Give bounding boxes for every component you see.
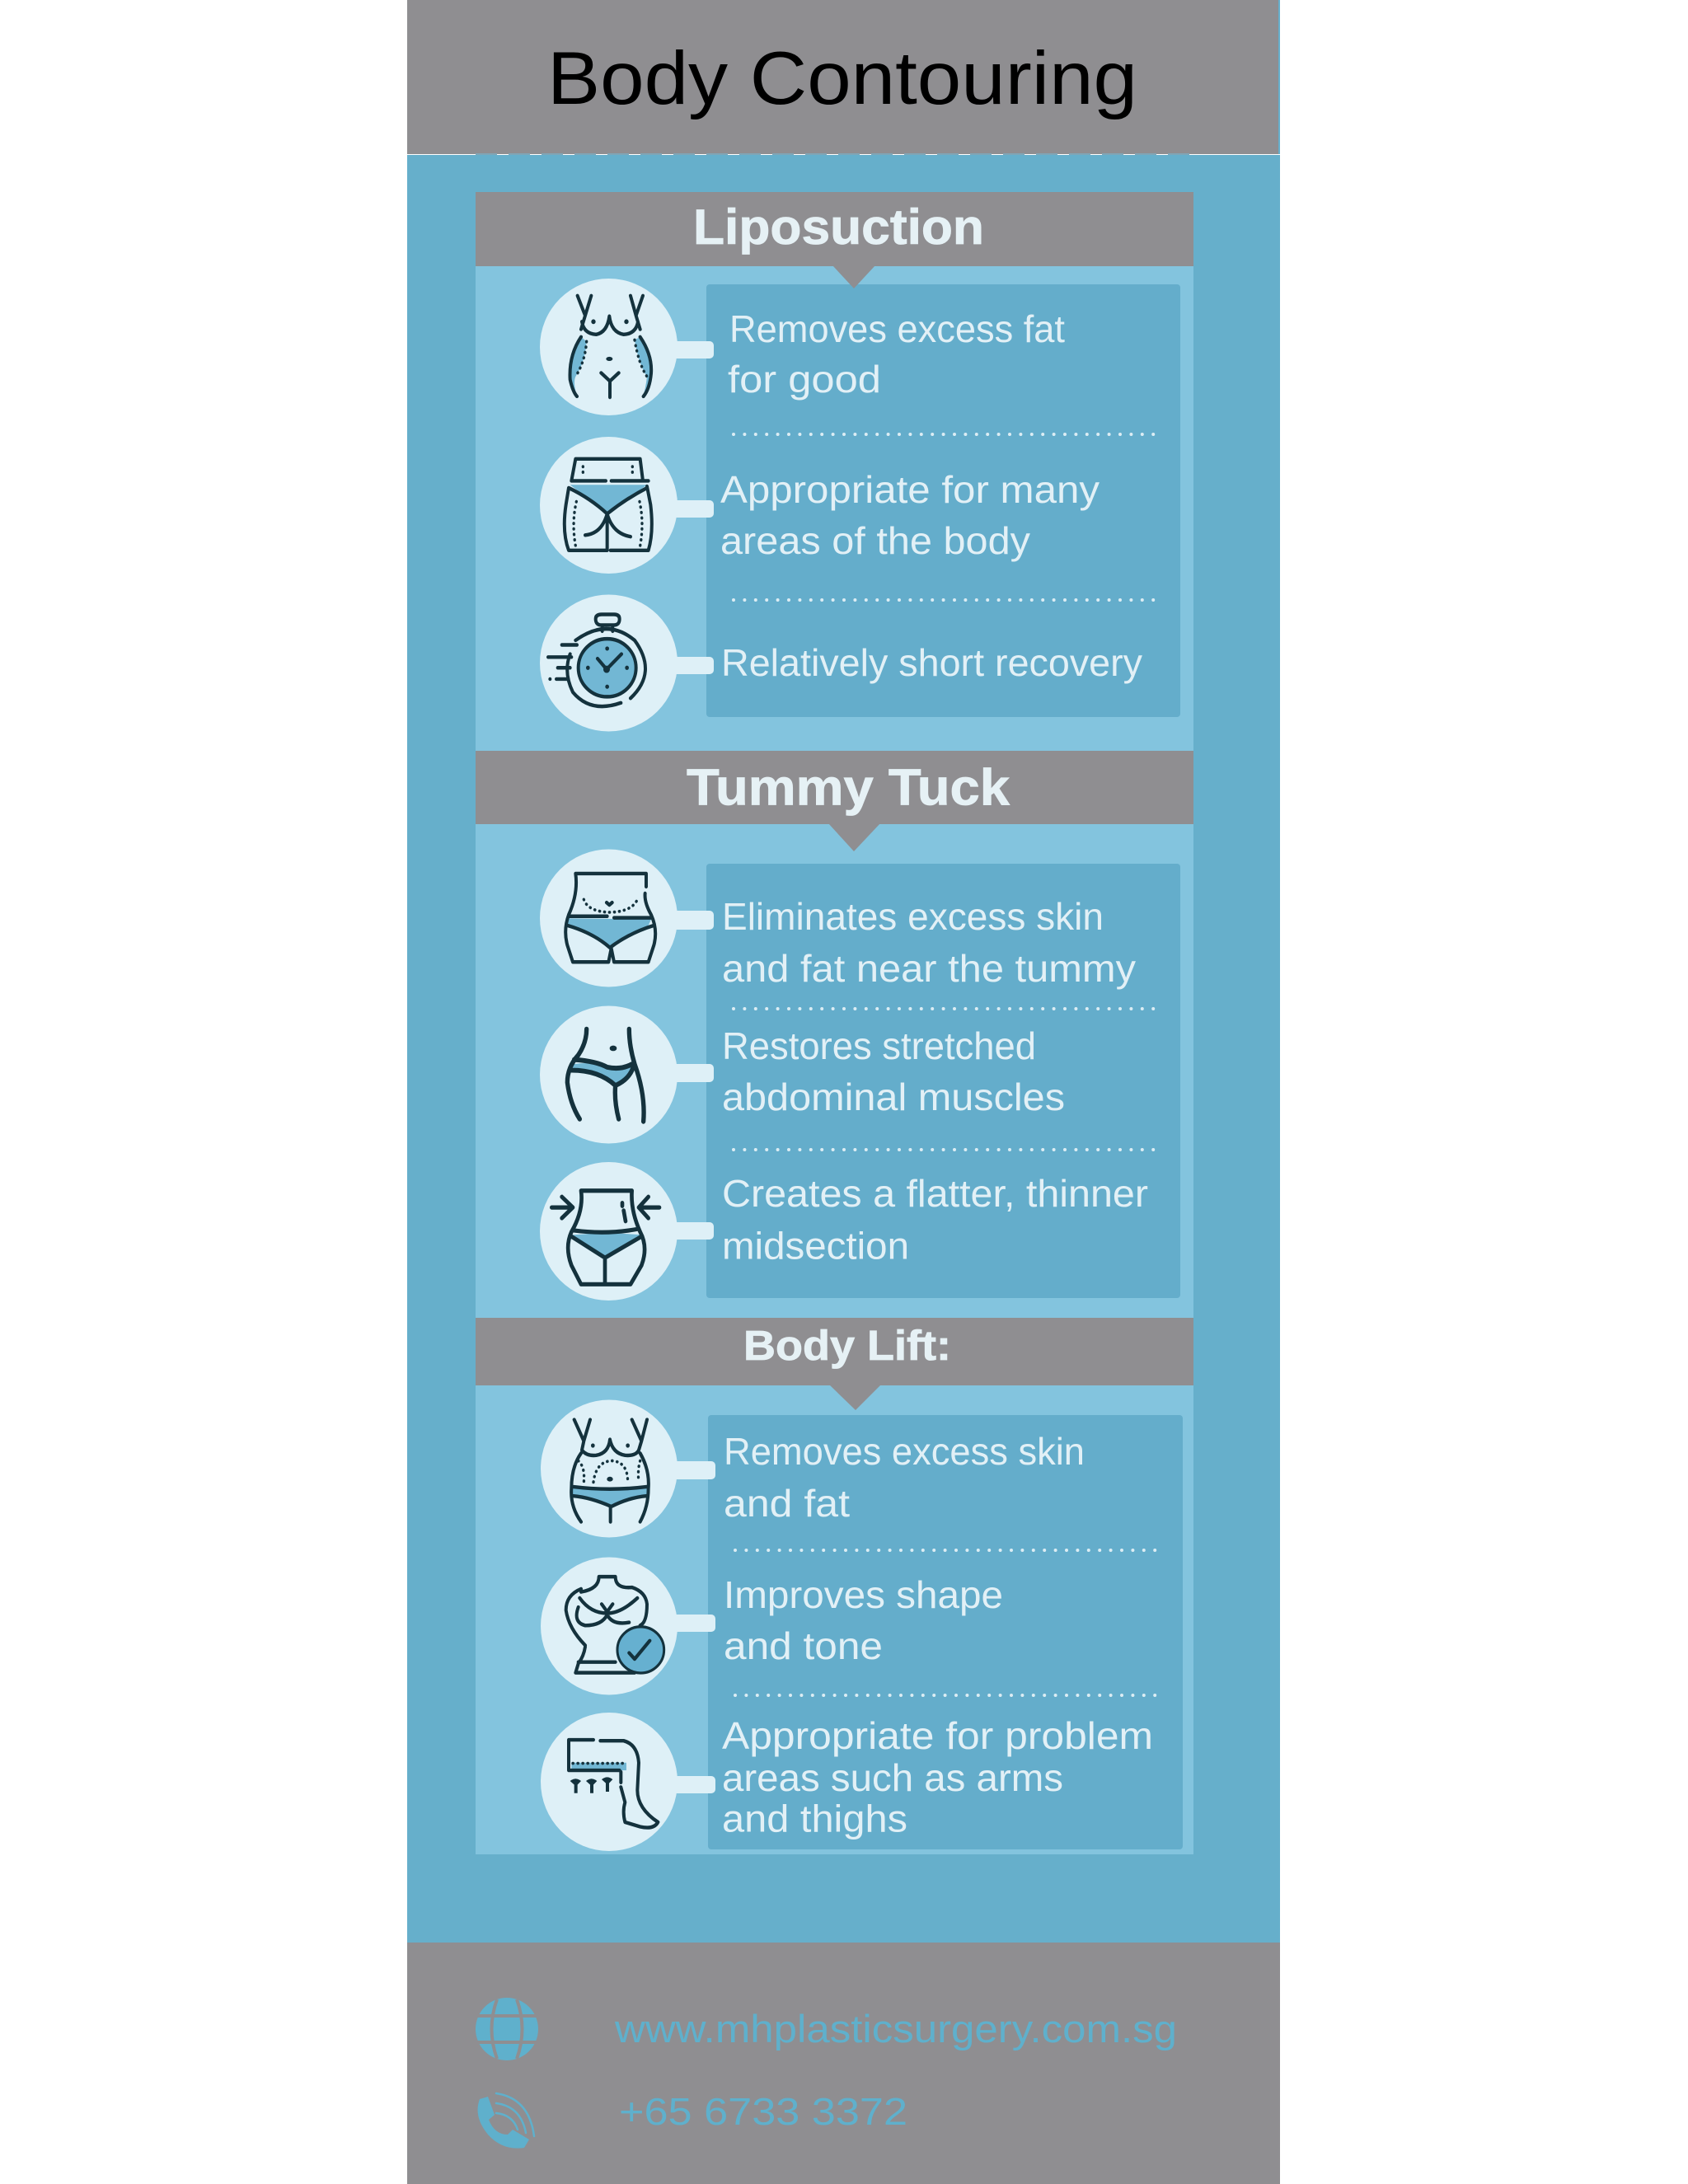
- icon: torso with side fat: [570, 296, 651, 397]
- benefit text: Removes excess skin: [724, 1430, 1085, 1473]
- icon: stopwatch: [548, 615, 645, 706]
- benefit text: and thighs: [722, 1797, 907, 1840]
- inner text box: [706, 864, 1180, 1298]
- circle and connector backdrops: [541, 1399, 715, 1851]
- circle and connector backdrops: [540, 849, 714, 1301]
- website: www.mhplasticsurgery.com.sg: [614, 2007, 1177, 2050]
- icon: thigh and leg: [569, 1740, 658, 1828]
- benefit text: areas such as arms: [722, 1756, 1063, 1799]
- heading bar: Liposuction: [476, 192, 1193, 288]
- panel: liposuction: [476, 192, 1193, 752]
- footer panel: [407, 1943, 1280, 2184]
- title banner: [407, 0, 1280, 154]
- icon: abdomen with incision: [565, 874, 655, 962]
- phone number: +65 6733 3372: [619, 2090, 907, 2133]
- icon: side waist: [567, 1029, 644, 1122]
- benefit text: Relatively short recovery: [721, 641, 1142, 684]
- heading bar: Liposuction: Liposuction: [693, 199, 984, 255]
- inner text box: [706, 284, 1180, 717]
- panel: tummy tuck: [476, 751, 1193, 1319]
- inner text box: [708, 1415, 1183, 1849]
- icon: torso with marked abdomen: [571, 1420, 649, 1521]
- benefit text: Restores stretched: [722, 1024, 1036, 1067]
- benefit text: areas of the body: [720, 519, 1030, 562]
- benefit text: and fat: [724, 1482, 850, 1525]
- icon: upper body with check badge: [566, 1577, 664, 1673]
- benefit text: and tone: [724, 1624, 883, 1667]
- benefit text: Removes excess fat: [729, 307, 1065, 350]
- icon: phone: [478, 2093, 534, 2149]
- panel: body lift: [476, 1318, 1193, 1854]
- icon: waist with inward arrows: [551, 1191, 659, 1284]
- benefit text: for good: [728, 358, 881, 401]
- benefit text: and fat near the tummy: [722, 947, 1136, 990]
- benefit text: Appropriate for many: [720, 468, 1100, 511]
- heading bar: Body Lift: [476, 1318, 1193, 1410]
- benefit text: Creates a flatter, thinner: [722, 1172, 1148, 1215]
- heading bar: Tummy Tuck: [476, 751, 1193, 851]
- icon: hips and shorts: [565, 459, 652, 551]
- title: Body Contouring: [547, 37, 1137, 120]
- benefit text: Appropriate for problem: [722, 1714, 1153, 1757]
- benefit text: Eliminates excess skin: [722, 895, 1104, 938]
- circle and connector backdrops: [540, 279, 714, 732]
- benefit text: midsection: [722, 1225, 909, 1268]
- heading bar: Body Lift: Body Lift:: [743, 1322, 951, 1369]
- benefit text: Improves shape: [724, 1573, 1003, 1616]
- blue main panel: [407, 155, 1280, 1943]
- benefit text: abdominal muscles: [722, 1076, 1065, 1118]
- heading bar: Tummy Tuck: Tummy Tuck: [687, 760, 1010, 816]
- icon: globe: [476, 1998, 538, 2060]
